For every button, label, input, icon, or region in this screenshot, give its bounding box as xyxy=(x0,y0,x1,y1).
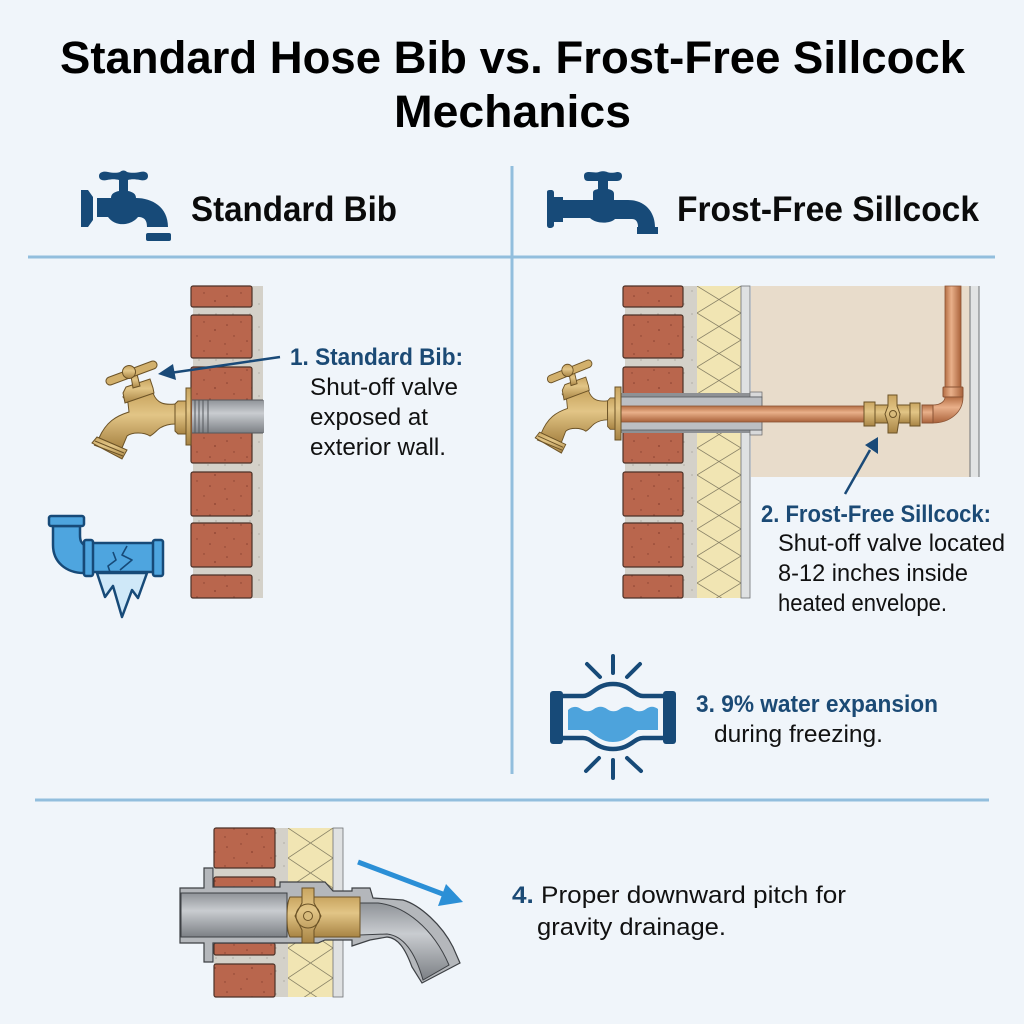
callout 3: water expansion xyxy=(696,691,938,748)
callout 4: downward pitch xyxy=(512,882,846,941)
pipe bore xyxy=(181,893,287,937)
heading: frost-free sillcock: Frost-Free Sillcock xyxy=(677,190,980,229)
brick wall xyxy=(191,286,263,598)
galvanized pipe xyxy=(192,400,264,433)
callout 4: downward pitch: gravity drainage. xyxy=(537,914,726,941)
icon: frost-free faucet xyxy=(547,171,658,234)
arrow to valve xyxy=(158,357,280,380)
sleeve housing xyxy=(180,868,460,983)
panel: frost-free sillcock diagram xyxy=(535,286,979,598)
brass faucet xyxy=(535,364,617,453)
heading: standard bib: Standard Bib xyxy=(191,190,397,229)
callout 2: frost-free sillcock: heated envelope. xyxy=(778,590,947,617)
title xyxy=(60,32,966,137)
brass faucet xyxy=(92,365,191,459)
callout 1: standard bib: exterior wall. xyxy=(310,434,446,461)
panel: downward pitch cross-section xyxy=(180,828,463,997)
icon: standard bib faucet xyxy=(81,170,171,241)
callout 1: standard bib xyxy=(290,344,463,461)
callout 3: water expansion: 3. 9% water expansion xyxy=(696,691,938,718)
shut-off valve xyxy=(864,395,920,433)
wall layers xyxy=(623,286,750,598)
callout 1: standard bib: Shut-off valve xyxy=(310,374,458,401)
arrow to valve xyxy=(845,437,878,494)
callout 2: frost-free sillcock xyxy=(761,501,1005,617)
faucet flange xyxy=(615,387,621,440)
arrow: drainage direction xyxy=(358,862,463,906)
callout 2: frost-free sillcock: 2. Frost-Free Sillcock: xyxy=(761,501,991,528)
callout 1: standard bib: 1. Standard Bib: xyxy=(290,344,463,371)
callout 3: water expansion: during freezing. xyxy=(714,721,883,748)
callout 4: downward pitch: 4. Proper downward pitch for xyxy=(512,882,846,909)
callout 1: standard bib: exposed at xyxy=(310,404,428,431)
brass valve xyxy=(287,888,360,943)
title: Standard Hose Bib vs. Frost-Free Sillcock xyxy=(60,32,966,83)
panel: standard bib diagram xyxy=(92,286,280,598)
title: Mechanics xyxy=(394,86,631,137)
wall layers xyxy=(214,828,343,997)
sleeve and copper supply line xyxy=(620,286,963,435)
callout 2: frost-free sillcock: 8-12 inches inside xyxy=(778,560,968,587)
spout bore xyxy=(360,903,449,980)
callout 2: frost-free sillcock: Shut-off valve located xyxy=(778,530,1005,557)
icon: frozen cracked pipe xyxy=(49,516,163,617)
interior heated space xyxy=(751,286,979,477)
icon: water expansion pipe xyxy=(550,656,676,778)
